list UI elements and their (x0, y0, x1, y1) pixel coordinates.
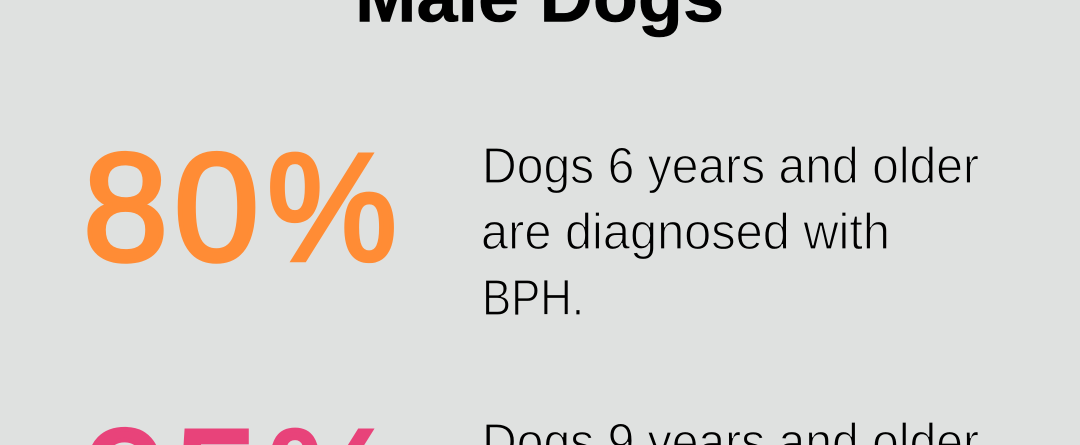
stat number: 80% (83, 122, 397, 293)
stat number: 80%: % (267, 122, 397, 293)
stat: 80% (83, 122, 979, 326)
stat description: dogs 6 years and older (481, 137, 979, 326)
stat description: dogs 6 years and older: are diagnosed with (481, 203, 890, 260)
stat description: dogs 6 years and older: BPH. (482, 269, 584, 326)
stat description: dogs 6 years and older: Dogs 6 years and older (482, 137, 979, 194)
stat: 95% (83, 398, 979, 445)
stat number: 80%: 80 (83, 122, 259, 293)
stat number: 95% (83, 398, 397, 445)
